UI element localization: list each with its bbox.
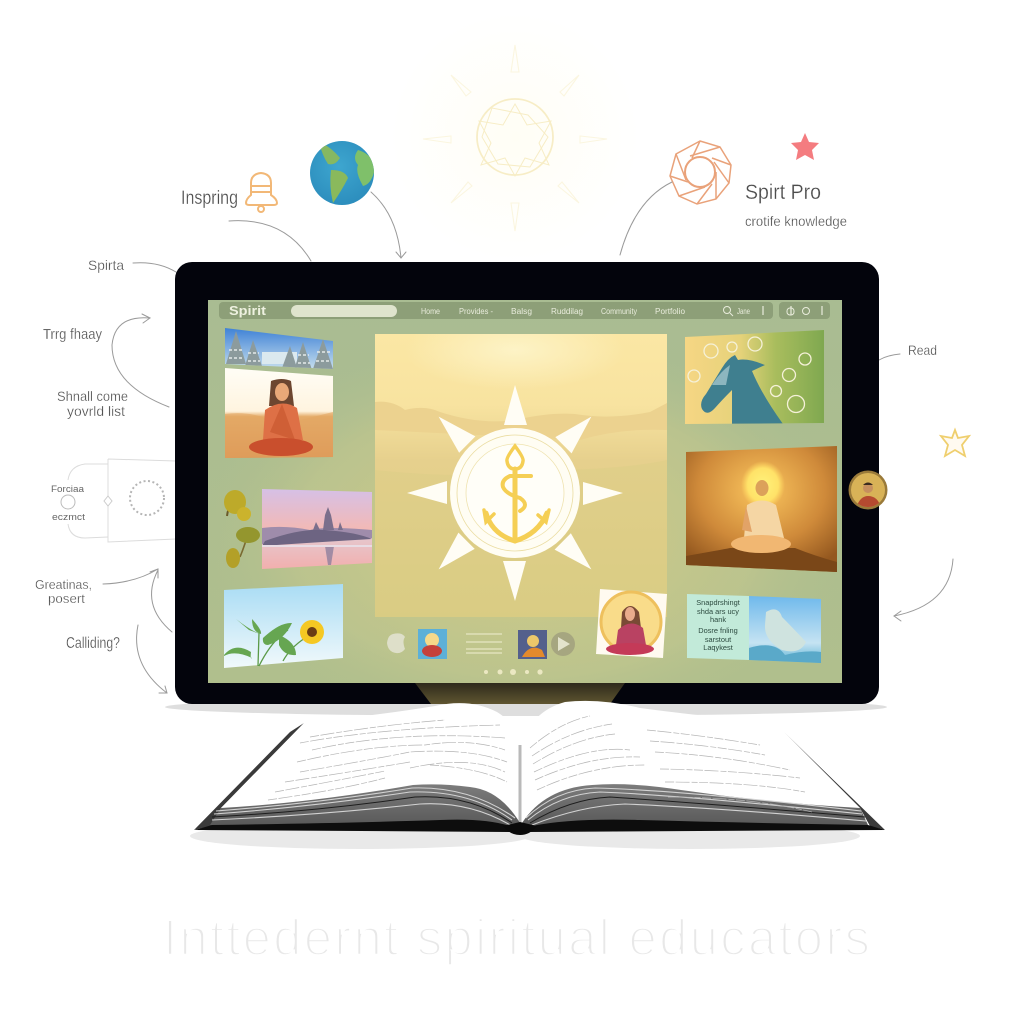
navigation bar: Jane xyxy=(737,307,750,316)
glow below screen xyxy=(415,683,625,704)
arrow: globe to tablet xyxy=(371,192,406,258)
connector: Read xyxy=(879,354,900,360)
anchor symbol xyxy=(484,446,549,541)
thumbnail 2 xyxy=(518,630,547,659)
card: text and sea creature: hank xyxy=(710,615,726,624)
image: glowing meditating monk xyxy=(686,446,837,572)
label: Greatinas posert: posert xyxy=(48,591,85,606)
card: text and sea creature: Dosre fnling xyxy=(698,626,738,635)
curved arrow: Trrg fhaay xyxy=(112,314,169,407)
image: snowy trees xyxy=(225,328,334,372)
label: Inspiring: Inspring xyxy=(181,188,238,209)
right pages xyxy=(522,701,860,823)
card: text and sea creature xyxy=(687,594,821,663)
coral emblem xyxy=(670,141,731,204)
label: Read: Read xyxy=(908,342,937,358)
book cover strips xyxy=(194,723,885,830)
navigation bar: Home xyxy=(421,307,440,316)
right page text xyxy=(530,716,812,812)
navigation bar: Balsg xyxy=(511,307,532,316)
label: Spirta: Spirta xyxy=(88,257,124,273)
arrow: lower right xyxy=(894,559,953,621)
book shadow xyxy=(190,823,860,849)
image: lake temple at dusk xyxy=(262,489,372,569)
sketch diagram: Forciaa xyxy=(51,459,176,542)
navigation bar: Spirit xyxy=(229,303,267,318)
card: text and sea creature: Laqykest xyxy=(703,643,733,652)
icon: outline star xyxy=(941,430,969,456)
card: text and sea creature: Snapdrshingt xyxy=(696,598,740,607)
sun disc xyxy=(450,428,580,558)
label: crotife knowledge: crotife knowledge xyxy=(745,213,847,229)
faint sun emblem at top xyxy=(390,12,640,262)
screen xyxy=(208,300,842,683)
label: Shnall come yourld list xyxy=(57,388,128,419)
image: sunflower xyxy=(224,584,343,668)
card: text and sea creature: shda ars ucy xyxy=(697,607,739,616)
connector: Inspiring to tablet xyxy=(229,221,311,261)
spine base xyxy=(503,822,537,835)
tablet xyxy=(175,262,888,704)
navigation bar: Ruddilag xyxy=(551,307,583,316)
play button xyxy=(551,632,575,656)
left page edges xyxy=(195,784,520,832)
left page text xyxy=(268,720,507,800)
apple icon xyxy=(387,633,405,653)
connector: Spirta xyxy=(133,263,176,272)
navigation bar xyxy=(219,302,830,319)
label: Shnall come yourld list: yovrld list xyxy=(67,403,125,419)
tablet frame xyxy=(175,262,879,704)
card: text and sea creature: sarstout xyxy=(705,635,731,644)
tablet shadow xyxy=(165,698,887,716)
image: horse with mandalas xyxy=(685,330,824,425)
arrow: Calliding xyxy=(137,625,167,693)
image: meditating figure in red robe xyxy=(225,368,333,458)
icon: red star xyxy=(791,133,819,160)
thumbnail 1 xyxy=(418,629,447,659)
hero panel with sun and anchor xyxy=(375,310,667,617)
spine highlight xyxy=(518,745,522,823)
image: small trees xyxy=(224,490,260,568)
pagination dots xyxy=(484,669,543,675)
sketch diagram: Forciaa: eczmct xyxy=(52,512,85,523)
image: figure in halo xyxy=(596,589,667,658)
arrows: Greatinas xyxy=(103,569,172,632)
navigation bar: Portfolio xyxy=(655,307,686,316)
avatar xyxy=(848,470,888,510)
left pages xyxy=(221,703,520,823)
list lines xyxy=(466,634,502,653)
label: Greatinas posert xyxy=(35,577,92,606)
bottom title: Inttedernt spiritual educators xyxy=(163,909,870,966)
open book xyxy=(194,701,885,835)
sketch diagram: Forciaa: Forciaa xyxy=(51,484,84,494)
sun rays xyxy=(407,385,623,601)
icon: bell xyxy=(246,173,277,212)
label: Greatinas posert: Greatinas, xyxy=(35,577,92,592)
right page edges xyxy=(522,784,885,832)
navigation bar: Community xyxy=(601,307,637,316)
label: Shnall come yourld list: Shnall come xyxy=(57,388,128,404)
label: Trrg fhaay: Trrg fhaay xyxy=(43,326,102,343)
globe icon xyxy=(310,141,375,205)
label: Spirit Pro: Spirt Pro xyxy=(745,181,821,204)
bottom media controls xyxy=(387,629,575,675)
label: Calliding?: Calliding? xyxy=(66,635,120,652)
connector: emblem to tablet xyxy=(620,182,672,255)
navigation bar: Provides - xyxy=(459,307,493,316)
